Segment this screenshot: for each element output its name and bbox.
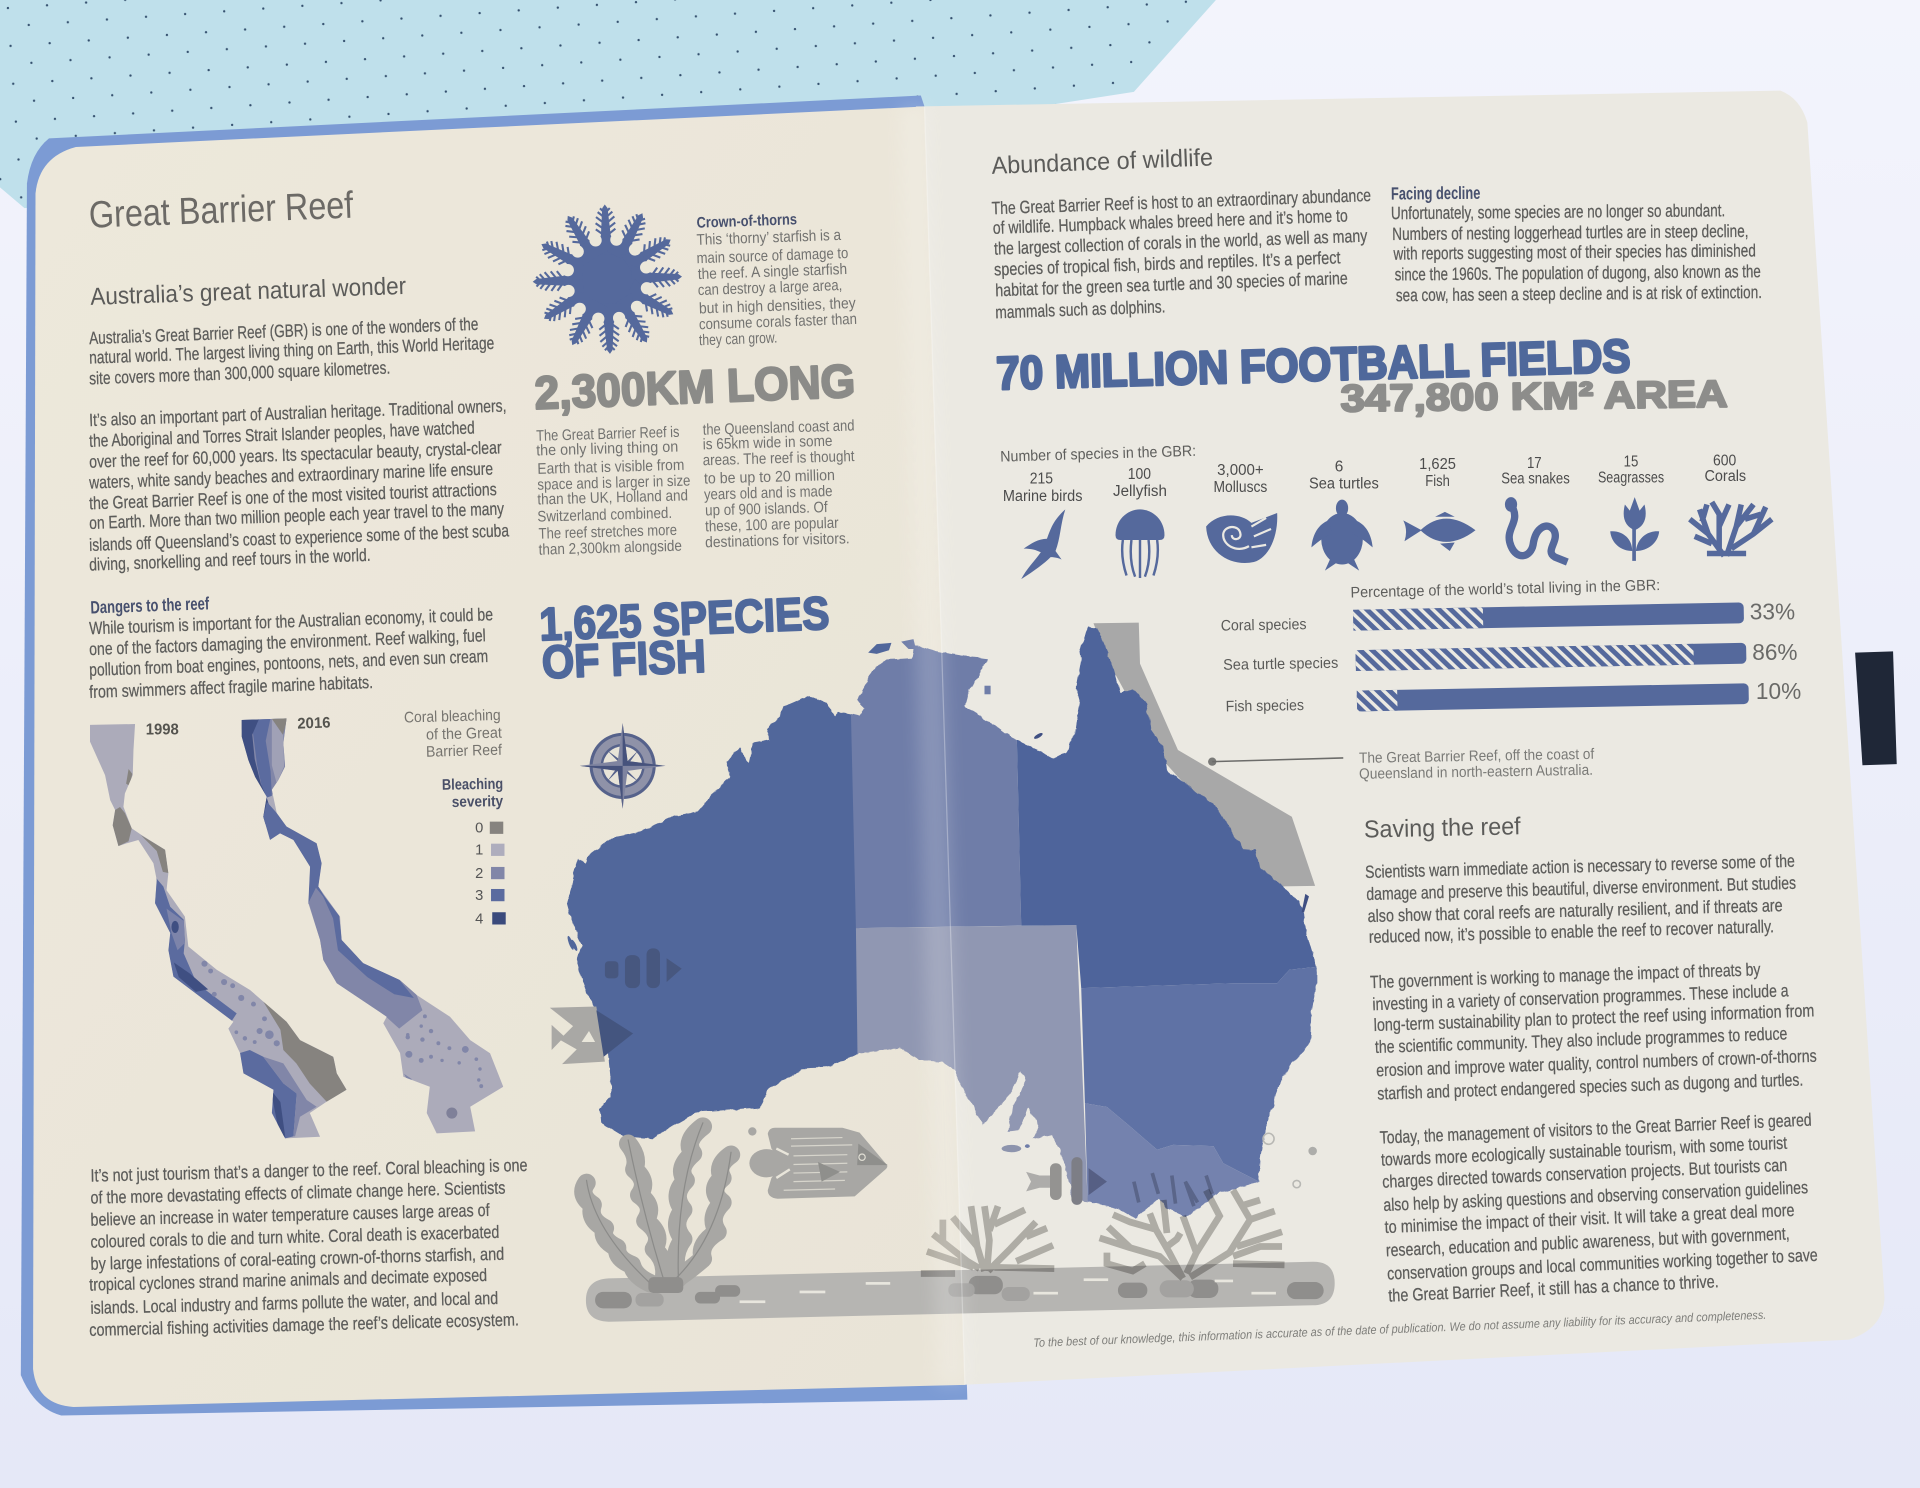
icon: compass rose [580, 723, 666, 809]
text block: crown-of-thorns: consume corals faster than [699, 311, 857, 333]
text block: facing decline [1391, 183, 1762, 305]
species: fish [1403, 456, 1476, 551]
text block: coral bleaching explanation: believe an increase in water temperature causes large areas of [90, 1200, 490, 1230]
text block: saving the reef: starfish and protect endangered species such as dugong and turtles. [1377, 1069, 1804, 1104]
species: molluscs: 3,000+ [1217, 462, 1264, 479]
text block: saving the reef [1365, 851, 1818, 1306]
text block: abundance: of wildlife. Humpback whales breed here and it’s home to [993, 205, 1348, 238]
text block: facing decline: Unfortunately, some species are no longer so abundant. [1391, 200, 1725, 223]
legend: bleaching severity: 0 [475, 821, 483, 837]
left page [33, 107, 965, 1407]
text block: saving the reef: the Great Barrier Reef, it still has a chance to thrive. [1388, 1271, 1719, 1306]
text block: coral bleaching explanation [89, 1155, 528, 1340]
species: corals: Corals [1704, 468, 1746, 485]
dotted blue paper [0, 0, 1216, 208]
text block: reef description column two: destinations for visitors. [705, 530, 850, 551]
species: sea snakes: 17 [1527, 455, 1542, 472]
text block: reef description column two [702, 417, 855, 551]
text block: reef description column two: is 65km wide in some [702, 433, 833, 453]
elastic band [1855, 651, 1897, 765]
text block: facing decline: with reports suggesting most of their species has diminished [1393, 240, 1756, 264]
illustration: bubbles [1263, 1133, 1317, 1188]
legend: bleaching severity [442, 776, 506, 927]
text block: dangers to the reef: While tourism is important for the Australian economy, it could be [89, 604, 493, 638]
Western Australia [567, 696, 860, 1140]
text block: reef description column one: Earth that is visible from [537, 457, 685, 478]
heading: natural wonder: Australia’s great natural wonder [90, 273, 407, 311]
text block: crown-of-thorns: but in high densities, they [699, 295, 856, 317]
illustration: ghost fish on Western Australia [605, 948, 682, 988]
text block: dangers to the reef: Dangers to the reef [90, 593, 210, 617]
species: fish: Fish [1425, 473, 1450, 490]
stat: 1,625 species of fish: 1,625 SPECIES [538, 587, 830, 650]
text block: facing decline: since the 1960s. The population of dugong, also known as the [1395, 261, 1761, 284]
South Australia [856, 925, 1089, 1224]
legend: bleaching severity: 2 [475, 866, 483, 882]
species: jellyfish: 100 [1128, 466, 1151, 483]
species: marine birds [1003, 471, 1083, 579]
text block: abundance: The Great Barrier Reef is host to an extraordinary abundance [991, 185, 1371, 218]
text block: crown-of-thorns: main source of damage to [696, 245, 849, 267]
footer disclaimer: To the best of our knowledge, this information is accurate as of the date of publication. We do not assume any liability for its accuracy and completeness. [1033, 1308, 1767, 1350]
bar: sea turtle species: 86% [1752, 639, 1798, 665]
text block: saving the reef: reduced now, it’s possible to enable the reef to recover naturally. [1369, 916, 1774, 947]
text block: introduction: It’s also an important part of Australian heritage. Traditional owners, [89, 396, 507, 430]
legend: bleaching severity: 3 [475, 888, 483, 904]
text block: introduction: the Aboriginal and Torres Strait Islander peoples, have watched [89, 417, 475, 451]
title: Great Barrier Reef [88, 185, 354, 237]
text block: saving the reef: towards more ecologically sustainable tourism, with some tourist [1381, 1133, 1788, 1170]
text block: saving the reef: charges directed towards conservation projects. But tourists can [1382, 1155, 1788, 1192]
species: jellyfish: Jellyfish [1113, 483, 1167, 500]
text block: coral bleaching explanation: by large infestations of coral-eating crown-of-thorns starfish, and [90, 1244, 504, 1274]
map: islands [566, 639, 1309, 1152]
legend: bleaching severity: Bleaching [442, 776, 503, 794]
illustration: large fish [748, 1127, 888, 1199]
bar: coral species [1221, 599, 1795, 635]
Northern Territory [851, 645, 1022, 928]
species: sea turtles: Sea turtles [1309, 476, 1379, 493]
text: coral bleaching caption [404, 707, 503, 761]
text block: reef description column one: the only living thing on [536, 439, 678, 460]
text block: crown-of-thorns: Crown-of-thorns [696, 211, 797, 232]
text block: dangers to the reef: from swimmers affect fragile marine habitats. [89, 672, 373, 702]
text block: coral bleaching explanation: It’s not just tourism that’s a danger to the reef. Coral bleaching is one [90, 1155, 528, 1186]
text block: introduction: over the reef for 60,000 years. Its spectacular beauty, crystal-clear [89, 437, 502, 472]
map: 1998 coral bleaching [90, 724, 346, 1138]
text block: introduction: on Earth. More than two million people each year travel to the many [89, 498, 504, 533]
text block: reef description column two: the Queensland coast and [702, 417, 855, 439]
text block: reef description column two: years old and is made [704, 483, 833, 504]
text block: reef description column one: than 2,300km alongside [538, 538, 682, 559]
text block: crown-of-thorns: they can grow. [699, 330, 778, 349]
text block: introduction: islands off Queensland’s coast to experience some of the best scuba [89, 520, 509, 555]
text block: introduction: the Great Barrier Reef is one of the most visited tourist attractions [89, 479, 497, 513]
text block: reef description column one: Switzerland combined. [537, 505, 672, 526]
species: jellyfish [1113, 466, 1167, 578]
text block: saving the reef: damage and preserve this beautiful, diverse environment. But studies [1366, 873, 1796, 904]
text block: saving the reef: research, education and public awareness, but with government, [1385, 1223, 1790, 1260]
species: seagrasses: 15 [1624, 454, 1638, 471]
illustration: small coral [921, 1206, 1054, 1273]
page fold highlight [900, 107, 967, 1385]
text block: crown-of-thorns: can destroy a large area, [698, 277, 843, 299]
illustration: fish on west coast [550, 1007, 633, 1064]
legend: bleaching severity: 1 [475, 843, 483, 859]
text block: crown-of-thorns: the reef. A single starfish [698, 261, 847, 283]
bar chart: percentage living in the GBR [1221, 599, 1801, 715]
legend: bleaching severity: 4 [475, 911, 483, 927]
text block: crown-of-thorns: This ‘thorny’ starfish is a [696, 227, 842, 249]
illustration: large coral [1100, 1190, 1284, 1278]
label: number of species: Number of species in the GBR: [1000, 443, 1196, 466]
heading: abundance of wildlife: Abundance of wildlife [991, 144, 1214, 180]
text block: introduction: site covers more than 300,000 square kilometres. [89, 357, 391, 388]
text block: reef description column one: The reef stretches more [538, 522, 677, 543]
Victoria [1084, 1103, 1259, 1218]
illustration: small fish [1026, 1157, 1107, 1205]
text block: dangers to the reef [89, 593, 493, 702]
text block: saving the reef: conservation groups and local communities working together to save [1387, 1245, 1818, 1284]
text block: abundance [991, 185, 1371, 322]
text block: saving the reef: the scientific community. They also include programmes to reduce [1375, 1023, 1788, 1057]
text block: reef description column one: space and is larger in size [537, 473, 691, 494]
species: molluscs [1206, 462, 1277, 563]
text block: introduction [88, 314, 509, 575]
illustration: seabed with rocks [586, 1262, 1335, 1322]
book cover [21, 96, 967, 1416]
bar: sea turtle species [1223, 639, 1798, 674]
text block: reef description column one: than the UK, Holland and [537, 487, 688, 508]
text block: coral bleaching explanation: islands. Local industry and farms pollute the water, and local and [90, 1288, 498, 1318]
species: corals: 600 [1713, 452, 1736, 469]
text: coral bleaching caption: of the Great [426, 725, 503, 744]
illustration: ghost fish on Victoria coast [1134, 1173, 1212, 1206]
text block: saving the reef: The government is working to manage the impact of threats by [1370, 959, 1761, 992]
label: percentage heading: Percentage of the world’s total living in the GBR: [1350, 577, 1660, 602]
species: sea snakes [1501, 455, 1570, 562]
bar: fish species [1225, 678, 1801, 715]
bar: sea turtle species: Sea turtle species [1223, 655, 1339, 674]
icon: crown-of-thorns starfish [530, 202, 685, 356]
text block: facing decline: sea cow, has seen a steep decline and is at risk of extinction. [1396, 282, 1762, 305]
text block: introduction: natural world. The largest living thing on Earth, this World Heritage [89, 333, 495, 368]
label: 1998: 1998 [146, 722, 179, 739]
New South Wales [1081, 967, 1318, 1182]
Queensland [1016, 626, 1316, 988]
label: 2016: 2016 [297, 714, 331, 733]
species: seagrasses: Seagrasses [1598, 469, 1664, 486]
text block: reef description column two: areas. The reef is thought [702, 448, 855, 469]
text block: introduction: Australia’s Great Barrier Reef (GBR) is one of the wonders of the [89, 314, 479, 348]
callout: reef location [1208, 746, 1595, 783]
right page [916, 91, 1884, 1385]
text block: saving the reef: Scientists warn immediate action is necessary to reverse some of the [1365, 851, 1795, 882]
bar: coral species: 33% [1750, 599, 1795, 625]
text block: coral bleaching explanation: commercial fishing activities damage the reef’s delicate ecosystem. [89, 1309, 519, 1340]
species: sea turtles: 6 [1335, 458, 1343, 475]
text block: saving the reef: also show that coral reefs are naturally resilient, and if threats are [1367, 895, 1783, 926]
text block: coral bleaching explanation: tropical cyclones strand marine animals and decimate exposed [89, 1265, 487, 1295]
species: marine birds: 215 [1030, 471, 1053, 488]
text block: reef description column two: to be up to 20 million [704, 467, 835, 488]
text block: saving the reef: investing in a variety of conservation programmes. These include a [1372, 980, 1789, 1014]
text: coral bleaching caption: Coral bleaching [404, 707, 501, 726]
text block: introduction: diving, snorkelling and reef tours in the world. [89, 545, 371, 575]
text block: abundance: the largest collection of corals in the world, as well as many [994, 226, 1368, 259]
bar: fish species: Fish species [1225, 697, 1304, 715]
text block: dangers to the reef: one of the factors damaging the environment. Reef walking, fuel [89, 625, 486, 659]
text block: saving the reef: to minimise the impact of their visit. It will take a great deal more [1384, 1200, 1795, 1237]
legend: bleaching severity: severity [452, 793, 504, 811]
text block: reef description column two: these, 100 are popular [705, 515, 839, 535]
text block: coral bleaching explanation: of the more devastating effects of climate change here. Scientists [90, 1178, 506, 1208]
illustration: seaweed [583, 1123, 731, 1293]
text block: dangers to the reef: pollution from boat engines, pontoons, nets, and even sun cream [89, 646, 488, 680]
text block: abundance: mammals such as dolphins. [995, 296, 1166, 322]
text block: saving the reef: erosion and improve water quality, control numbers of crown-of-thorns [1376, 1046, 1817, 1080]
text block: crown-of-thorns [696, 211, 857, 349]
species: fish: 1,625 [1419, 456, 1456, 473]
text block: reef description column one: The Great Barrier Reef is [536, 424, 680, 445]
species: marine birds: Marine birds [1003, 488, 1083, 505]
species: sea turtles [1309, 458, 1379, 571]
map: Great Barrier Reef band [1093, 623, 1315, 887]
species: sea snakes: Sea snakes [1501, 471, 1570, 488]
callout: reef location: The Great Barrier Reef, off the coast of [1359, 746, 1595, 767]
text block: abundance: habitat for the green sea turtle and 30 species of marine [995, 268, 1348, 300]
species: corals [1690, 452, 1772, 556]
map: Australia [567, 626, 1318, 1218]
text block: saving the reef: long-term sustainability plan to protect the reef using information from [1373, 1000, 1815, 1035]
text block: reef description column two: up of 900 islands. Of [705, 499, 828, 520]
text block: introduction: waters, white sandy beaches and extraordinary marine life ensure [88, 458, 493, 493]
species: seagrasses [1598, 454, 1664, 561]
stat: 1,625 species of fish: OF FISH [541, 630, 707, 688]
text block: coral bleaching explanation: coloured corals to die and turn white. Coral death is exacerbated [90, 1222, 500, 1252]
text block: saving the reef: Today, the management of visitors to the Great Barrier Reef is geared [1379, 1110, 1812, 1148]
bar: coral species: Coral species [1221, 616, 1307, 635]
heading: saving the reef: Saving the reef [1364, 813, 1521, 844]
text: coral bleaching caption: Barrier Reef [426, 742, 503, 761]
text block: facing decline: Facing decline [1391, 183, 1481, 204]
text block: facing decline: Numbers of nesting loggerhead turtles are in steep decline, [1392, 221, 1749, 244]
stat: area: 347,800 KM² AREA [1340, 374, 1728, 420]
stat: 1,625 species of fish [538, 587, 830, 688]
species: molluscs: Molluscs [1213, 479, 1268, 496]
stat: 2,300km long: 2,300KM LONG [533, 355, 856, 419]
map: 2016 coral bleaching [242, 716, 504, 1134]
bar: fish species: 10% [1756, 678, 1801, 704]
text block: abundance: species of tropical fish, birds and reptiles. It’s a perfect [994, 247, 1341, 280]
stat: 70 million football fields: 70 MILLION FOOTBALL FIELDS [996, 330, 1631, 399]
callout: reef location: Queensland in north-eastern Australia. [1359, 762, 1593, 783]
text block: reef description column one [536, 424, 691, 559]
text block: saving the reef: also help by asking questions and observing conservation guidelines [1383, 1177, 1808, 1215]
